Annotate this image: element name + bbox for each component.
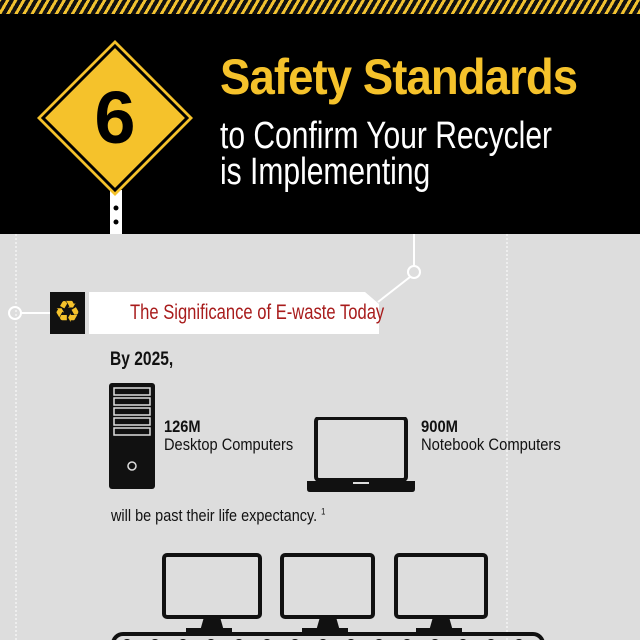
stat: desktop: [164, 417, 293, 454]
connector lines: [8, 234, 508, 640]
icon: sign: 6: [94, 76, 136, 159]
stat: notebook: Notebook Computers: [421, 435, 561, 454]
icon: laptop: [307, 417, 415, 492]
subtitle: is Implementing: [220, 151, 430, 193]
icon: recycle: [50, 292, 85, 334]
banner: [89, 292, 379, 334]
icon: recycle: ♻: [54, 295, 81, 330]
illustration: monitors on conveyor: [112, 553, 544, 640]
text: By 2025: By 2025,: [110, 349, 173, 370]
icon: sign: [37, 40, 193, 234]
title: Safety Standards: [220, 49, 577, 105]
stat: desktop: Desktop Computers: [164, 435, 293, 454]
section header: [50, 292, 384, 334]
hazard stripe: [0, 0, 640, 14]
stat: notebook: 900M: [421, 417, 458, 436]
text: life expectancy: will be past their life expectancy. 1: [111, 506, 325, 525]
subtitle: to Confirm Your Recycler: [220, 115, 552, 157]
stat: notebook: [421, 417, 561, 454]
stat: desktop: 126M: [164, 417, 201, 436]
header panel: [0, 14, 640, 234]
section title: The Significance of E-waste Today: [130, 301, 384, 324]
subtitle: [220, 115, 552, 193]
icon: desktop tower: [109, 383, 155, 489]
